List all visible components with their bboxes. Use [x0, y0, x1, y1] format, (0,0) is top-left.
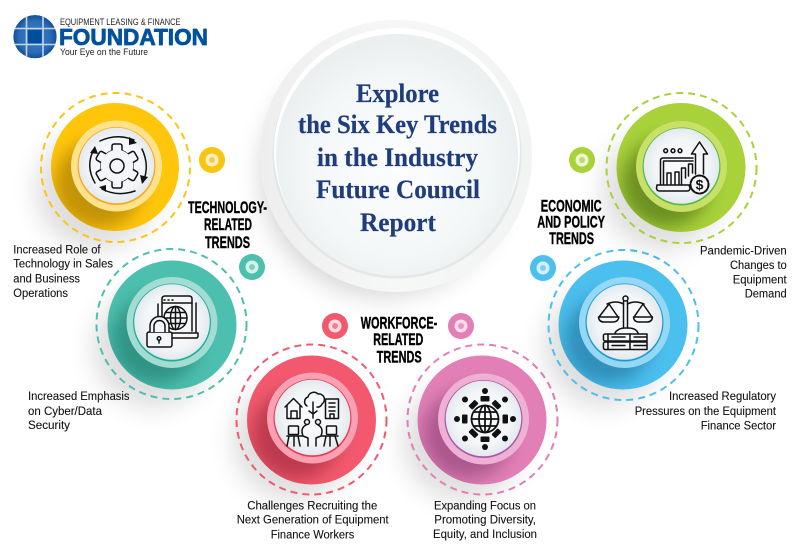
heading: Technology-Related Trends: TECHNOLOGY- [188, 199, 267, 217]
title: Explore [356, 79, 439, 108]
label: Challenges Recruiting [237, 498, 389, 542]
label: Increased Role of Technology: Technology in Sales [13, 257, 113, 271]
panel: recruiting workers (red) [233, 344, 386, 501]
label: Increased Role of Technology: Increased Role of [13, 242, 101, 256]
heading: Workforce-Related Trends [361, 314, 437, 366]
label: Increased Emphasis on Cyber/Data Security: on Cyber/Data [28, 404, 102, 418]
dot: pink [448, 313, 474, 339]
heading: Workforce-Related Trends: RELATED [373, 331, 423, 349]
title: Future Council [316, 175, 480, 204]
heading: Workforce-Related Trends: TRENDS [377, 348, 422, 366]
dot: green [569, 147, 595, 173]
central title circle [260, 20, 532, 296]
icon: browser, globe and padlock [147, 296, 198, 347]
label: Increased Role of Technology: and Business [13, 272, 80, 286]
heading: Economic and Policy Trends: AND POLICY [537, 213, 605, 231]
icon: dollar sign: $ [696, 176, 704, 192]
label: Increased Regulatory Pressures: Increased Regulatory [669, 389, 777, 403]
label: Increased Emphasis on Cyber/Data Security: Security [28, 418, 71, 432]
label: Expanding Focus: Expanding Focus on [434, 498, 536, 512]
label: Increased Regulatory Pressures [635, 389, 777, 432]
label: Challenges Recruiting: Next Generation of Equipment [237, 512, 389, 526]
dot: teal [239, 254, 265, 280]
label: Expanding Focus: Promoting Diversity, [434, 512, 536, 526]
label: Challenges Recruiting: Challenges Recruiting the [247, 498, 377, 512]
dot: blue [530, 255, 556, 281]
icon: scales of justice on books [598, 296, 652, 350]
icon: gear with rotating arrows [90, 137, 148, 194]
heading: Economic and Policy Trends: ECONOMIC [541, 198, 602, 216]
title: in the Industry [317, 143, 478, 172]
label: Pandemic-Driven Changes: Demand [745, 287, 787, 301]
label: Increased Role of Technology [13, 242, 113, 300]
label: Pandemic-Driven Changes: Pandemic-Driven [700, 243, 787, 257]
label: Pandemic-Driven Changes: Equipment [733, 272, 787, 286]
panel: regulatory pressures (blue) [544, 250, 698, 407]
panel: cyber security (teal) [93, 249, 246, 408]
heading: Technology-Related Trends: RELATED [204, 216, 252, 234]
title [298, 79, 497, 237]
title: Report [360, 208, 436, 237]
label: Pandemic-Driven Changes [700, 243, 787, 301]
icon: home, tree, office and remote workers [285, 392, 338, 446]
label: Increased Emphasis on Cyber/Data Security: Increased Emphasis [28, 389, 130, 403]
icon: laptop chart with arrow and dollar badge [656, 142, 708, 194]
title: the Six Key Trends [298, 110, 497, 139]
label: Expanding Focus: Equity, and Inclusion [433, 527, 537, 541]
panel: diversity (pink) [403, 344, 558, 501]
label: Pandemic-Driven Changes: Changes to [730, 258, 787, 272]
label: Increased Emphasis on Cyber/Data Security [28, 389, 130, 432]
logo globe [13, 14, 58, 60]
logo: Equipment Leasing & Finance Foundation [13, 14, 208, 60]
heading: Workforce-Related Trends: WORKFORCE- [361, 314, 437, 332]
label: Increased Regulatory Pressures: Pressures on the Equipment [635, 404, 776, 418]
heading: Technology-Related Trends [188, 199, 267, 252]
label: Challenges Recruiting: Finance Workers [271, 528, 354, 542]
label: Increased Role of Technology: Operations [13, 286, 68, 300]
heading: Economic and Policy Trends: TRENDS [549, 230, 594, 248]
label: Expanding Focus [433, 498, 537, 541]
dot: red [322, 313, 348, 339]
logo top line: EQUIPMENT LEASING & FINANCE [60, 17, 180, 27]
heading: Economic and Policy Trends [537, 198, 605, 248]
icon: globe surrounded by people [454, 388, 516, 450]
panel: equipment demand (green) [602, 93, 756, 250]
panel: technology in sales (yellow) [36, 93, 190, 250]
dot: yellow [199, 147, 225, 173]
logo tagline: Your Eye on the Future [60, 47, 148, 58]
logo wordmark: FOUNDATION [59, 24, 208, 50]
label: Increased Regulatory Pressures: Finance Sector [701, 418, 776, 432]
heading: Technology-Related Trends: TRENDS [205, 234, 250, 252]
